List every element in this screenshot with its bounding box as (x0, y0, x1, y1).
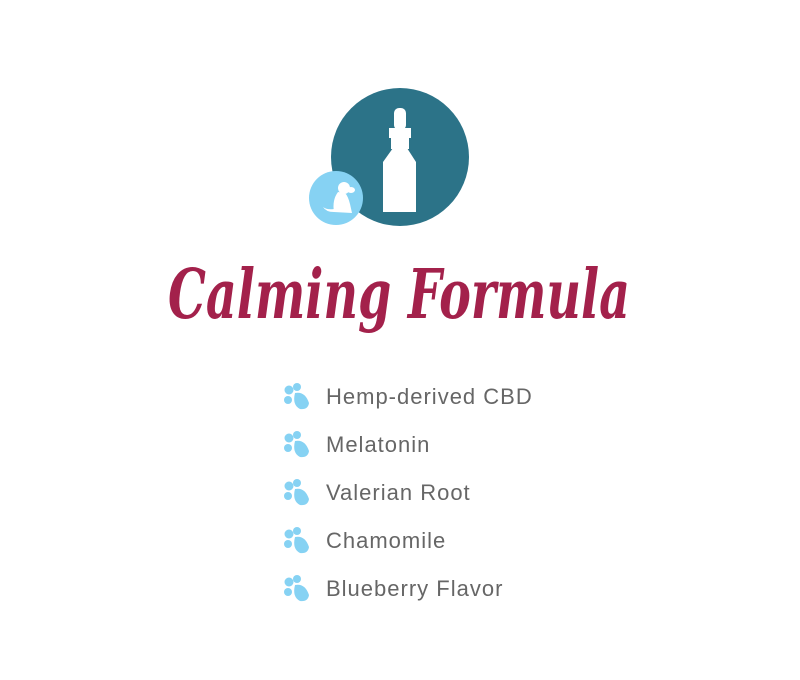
item 1: Hemp-derived CBD (326, 384, 533, 409)
icon: bottle (383, 108, 416, 212)
item 3: Valerian Root (326, 480, 471, 505)
item 2: Melatonin (326, 432, 430, 457)
item 2 (284, 431, 430, 458)
icon: dropper bottle with dog (309, 88, 469, 226)
icon: dog (323, 182, 355, 213)
item 4: Chamomile (326, 528, 446, 553)
item 4 (284, 527, 446, 554)
item 5: Blueberry Flavor (326, 576, 503, 601)
